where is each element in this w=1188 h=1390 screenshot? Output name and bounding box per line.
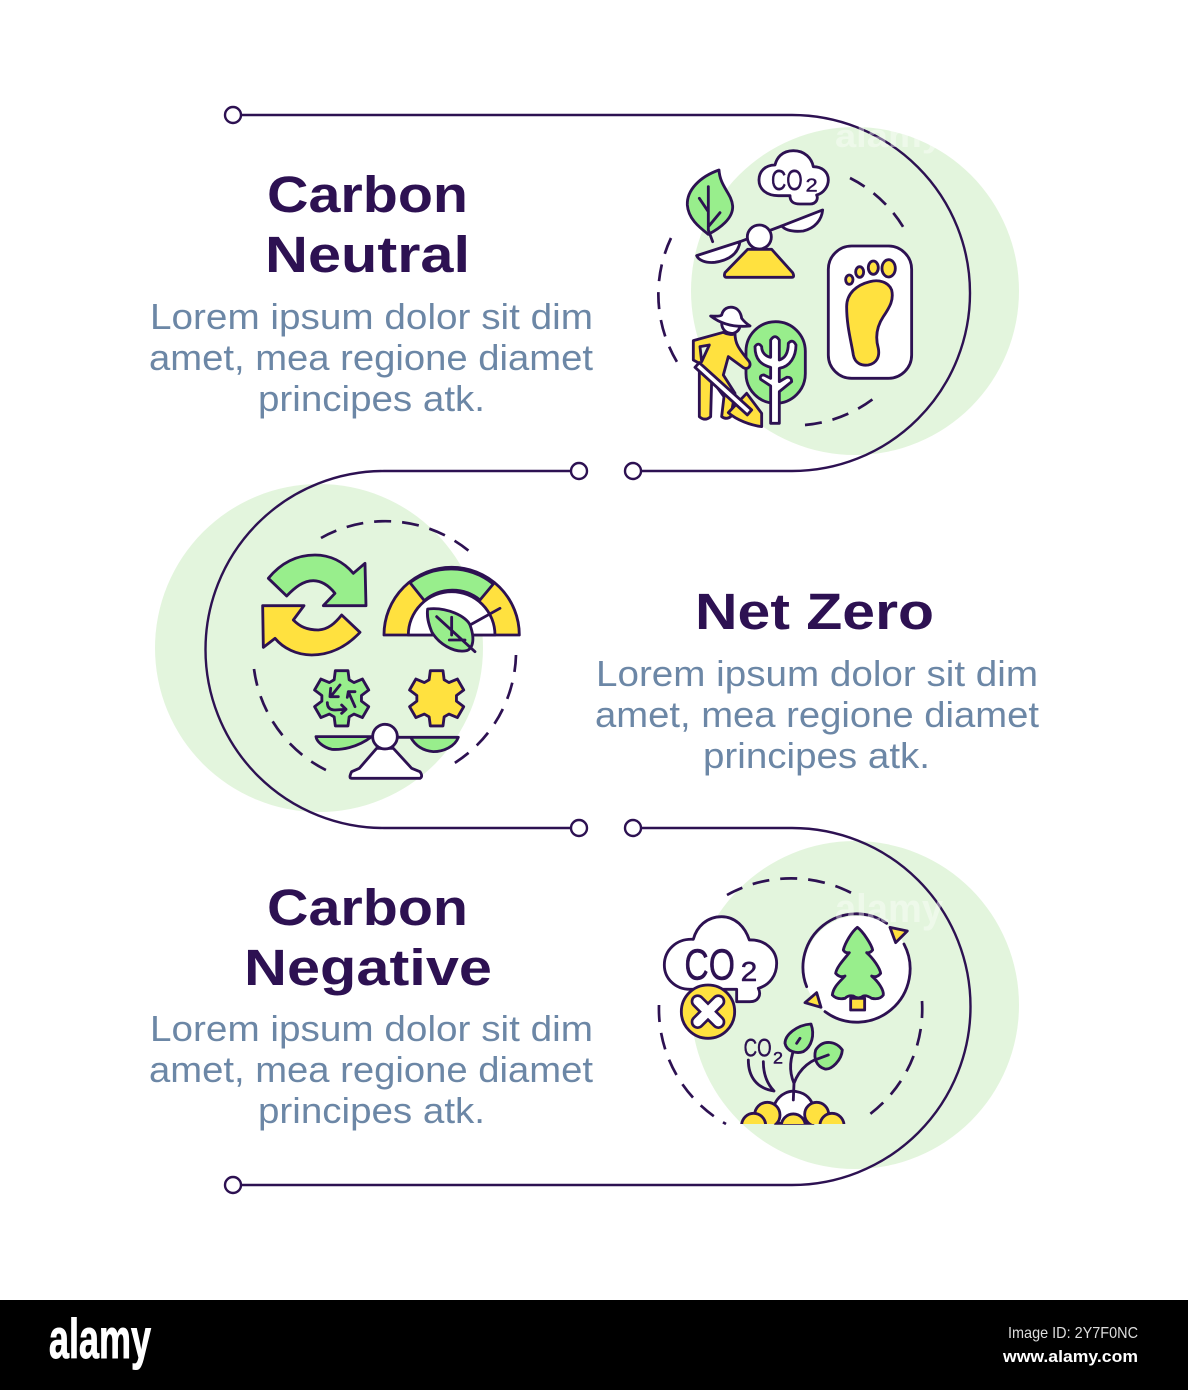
icon: cycle arrows: [263, 555, 366, 655]
icon: co2 cloud with cross: 2: [741, 956, 757, 987]
text block: principes atk.: [703, 735, 930, 776]
icon: seedling absorbing co2: [742, 1024, 844, 1138]
icon: recycling gear: [315, 671, 369, 726]
icon: seedling absorbing co2: 2: [773, 1048, 783, 1067]
heading: Carbon: [267, 166, 468, 223]
dashed ring: [658, 178, 905, 425]
icon: farmer with shovel and tree: [693, 307, 805, 427]
background circle: [691, 841, 1019, 1169]
icon: yellow gear: [410, 671, 464, 726]
icon: co2 cloud with cross: CO: [684, 940, 735, 989]
icon: level scale: [316, 724, 458, 778]
connector line: [225, 820, 971, 1193]
icon: seedling absorbing co2: CO: [744, 1035, 772, 1063]
background circle: [691, 127, 1019, 455]
icon: balance scale: [697, 210, 823, 277]
icon: tree in cycle: [803, 914, 911, 1023]
icon: leaf: [687, 170, 733, 242]
text block: amet, mea regione diamet: [149, 1049, 593, 1090]
text block: [595, 653, 1039, 776]
icon: co2 cloud: [759, 151, 828, 204]
footer logo: alamy: [49, 1307, 151, 1370]
icon group: negative: [664, 914, 911, 1138]
footer bar: [0, 1300, 1188, 1390]
text block: principes atk.: [258, 1090, 485, 1131]
dashed ring: [254, 521, 516, 772]
text block: amet, mea regione diamet: [149, 337, 593, 378]
icon: gauge with leaf: [384, 567, 519, 652]
text block: Lorem ipsum dolor sit dim: [150, 296, 593, 337]
panel: carbon neutral: [149, 107, 1019, 479]
connector line: [206, 463, 587, 836]
text block: [149, 296, 593, 419]
dashed ring: [659, 878, 922, 1124]
heading: [244, 879, 492, 996]
text block: amet, mea regione diamet: [595, 694, 1039, 735]
site url: www.alamy.com: [1002, 1347, 1138, 1366]
panel: carbon negative: [149, 820, 1019, 1193]
heading: Net Zero: [695, 583, 934, 640]
watermark: alamy: [835, 118, 943, 154]
panel: net zero: [155, 463, 1039, 836]
icon group: neutral: [687, 151, 912, 427]
background circle: [155, 484, 483, 812]
icon: co2 cloud with cross: [664, 917, 777, 1038]
image id: Image ID: 2Y7F0NC: [1008, 1325, 1138, 1342]
heading: Carbon: [267, 879, 468, 936]
connector line: [225, 107, 970, 479]
watermark: alamy: [835, 887, 944, 931]
heading: [265, 166, 470, 283]
text block: Lorem ipsum dolor sit dim: [596, 653, 1038, 694]
text block: [149, 1008, 593, 1131]
heading: Negative: [244, 939, 492, 996]
icon: co2 cloud: CO: [771, 165, 803, 197]
text block: Lorem ipsum dolor sit dim: [150, 1008, 593, 1049]
heading: Neutral: [265, 226, 470, 283]
icon: co2 cloud: 2: [806, 174, 818, 195]
icon: footprint: [828, 246, 912, 378]
icon group: net zero: [263, 555, 519, 778]
text block: principes atk.: [258, 378, 485, 419]
